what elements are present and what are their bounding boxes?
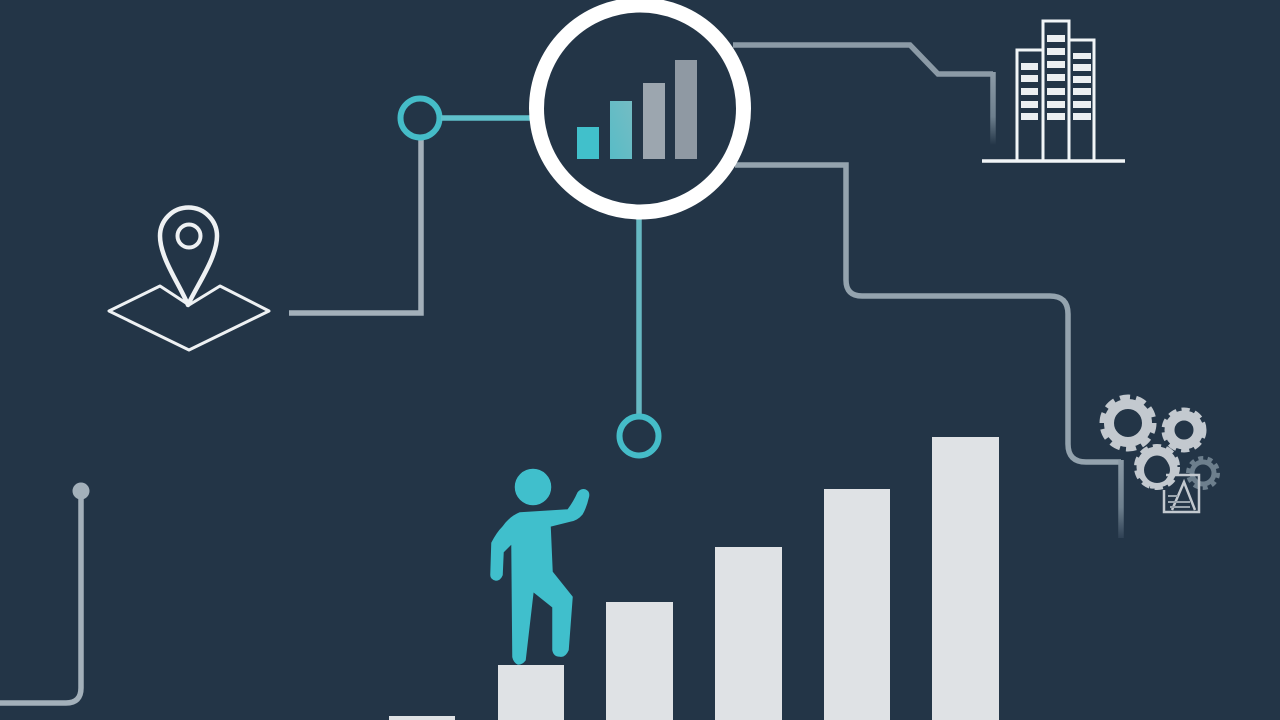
- document: [1150, 470, 1199, 512]
- person body: [491, 490, 589, 664]
- hub circle with bar chart: [536, 5, 744, 212]
- teal person climbing: [491, 470, 589, 664]
- connector: location to teal node: [289, 140, 421, 313]
- connector: hub to gears: [735, 165, 1121, 538]
- person head: [516, 470, 550, 504]
- gear medium: [1164, 410, 1204, 450]
- connector: hub to building: [733, 45, 993, 145]
- teal vertical line: [636, 218, 642, 415]
- connector: teal node to hub: [400, 98, 532, 138]
- icon: gears and document: [1102, 398, 1218, 512]
- hub mini bar chart: [577, 60, 697, 159]
- ground line: [982, 159, 1125, 163]
- hub ring: [536, 5, 744, 212]
- icon: office buildings: [982, 21, 1125, 161]
- gear large: [1102, 398, 1154, 448]
- teal ring node left: [400, 98, 440, 138]
- connector end dot: [72, 482, 90, 500]
- gear lower: [1136, 446, 1178, 488]
- building windows: [1021, 35, 1091, 120]
- teal line left: [441, 115, 532, 121]
- rising white bar chart: [389, 437, 999, 720]
- connector: bottom left: [0, 482, 90, 703]
- teal ring node bottom: [620, 416, 658, 456]
- building outlines: [1017, 21, 1094, 161]
- icon: map location pin: [109, 208, 269, 350]
- gear faded: [1188, 458, 1218, 488]
- connector: hub to person: [620, 218, 658, 456]
